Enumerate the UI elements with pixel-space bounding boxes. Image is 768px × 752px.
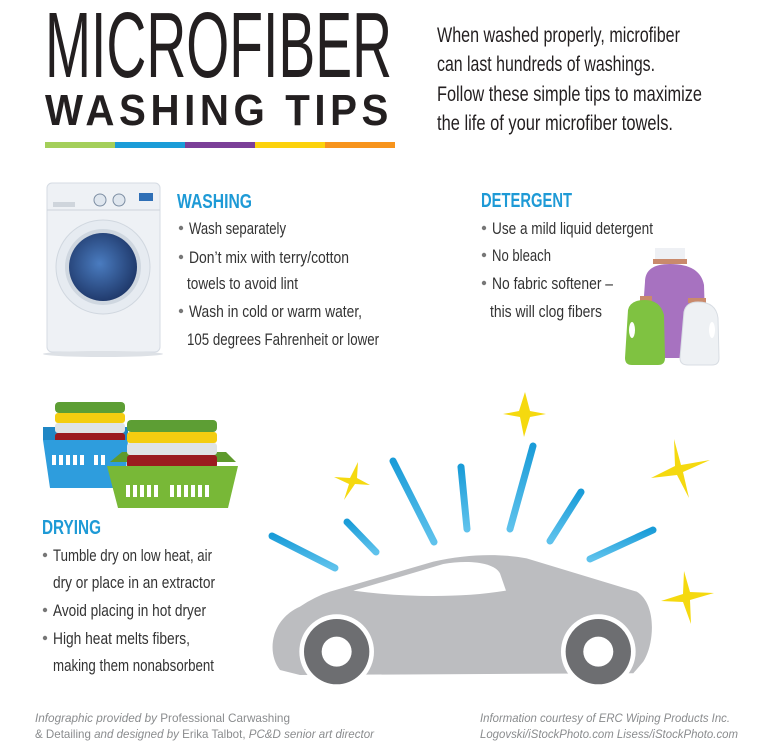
intro text: can last hundreds of washings. [437,53,655,76]
footer credits right: Logovski/iStockPhoto.com Lisess/iStockPhoto.com [480,727,738,741]
panel: drying: dry or place in an extractor [53,573,215,592]
color bar [45,142,395,148]
panel: detergent: DETERGENT [481,190,572,212]
title: WASHING TIPS [45,86,393,135]
intro text: Follow these simple tips to maximize [437,83,702,106]
icon: laundry baskets [43,402,238,508]
panel: washing: towels to avoid lint [187,274,298,293]
intro text: When washed properly, microfiber [437,24,680,47]
panel: drying: DRYING [42,517,101,539]
icon: shining car [272,392,714,689]
footer credits left [35,711,375,741]
footer credits left: Infographic provided by Professional Carwashing [35,711,290,725]
panel: washing: Don’t mix with terry/cotton [189,248,349,267]
footer credits right: Information courtesy of ERC Wiping Products Inc. [480,711,730,725]
icon: detergent bottles [625,248,719,365]
panel: drying: High heat melts fibers, [53,629,190,648]
intro text [437,24,702,135]
panel: detergent: No fabric softener – [492,274,613,293]
panel: detergent: Use a mild liquid detergent [492,219,653,238]
panel: drying: Avoid placing in hot dryer [53,601,206,620]
panel: washing: Wash in cold or warm water, [189,302,362,321]
panel: drying: Tumble dry on low heat, air [53,546,212,565]
panel: washing: 105 degrees Fahrenheit or lower [187,330,379,349]
panel: detergent: No bleach [492,246,551,265]
panel: washing: Wash separately [189,219,286,238]
footer credits left: & Detailing and designed by Erika Talbot, PC&D senior art director [35,727,375,741]
footer credits right [480,711,738,741]
panel: washing: WASHING [177,191,252,213]
title [45,0,393,135]
panel: detergent [481,190,653,321]
intro text: the life of your microfiber towels. [437,112,673,135]
panel: drying [42,517,215,675]
icon: washing machine [43,183,163,357]
panel: detergent: this will clog fibers [490,302,602,321]
panel: drying: making them nonabsorbent [53,656,214,675]
panel: washing [177,191,379,349]
